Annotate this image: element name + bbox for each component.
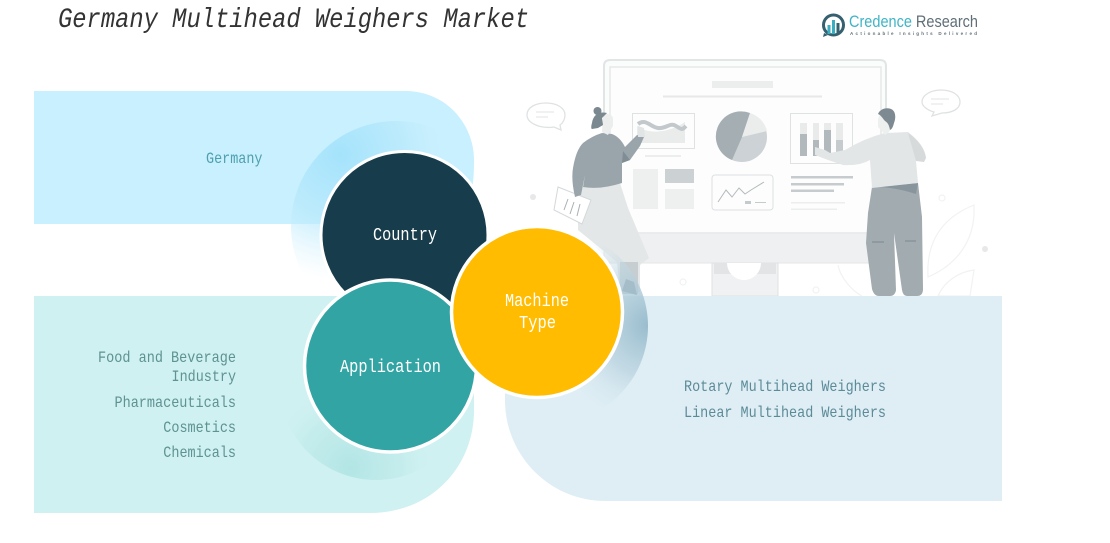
dashboard pie chart	[716, 111, 767, 162]
text: application items: Industry	[172, 368, 236, 386]
monitor	[604, 60, 886, 296]
text: machine type items: Rotary Multihead Weighers	[684, 378, 886, 396]
sweater	[572, 133, 644, 197]
man presenter	[815, 108, 926, 296]
text: application items: Food and Beverage	[98, 349, 236, 367]
circle: country	[321, 152, 488, 318]
decorative leaves and dots	[530, 194, 988, 296]
label: machine type: Machine	[505, 292, 569, 312]
text: application items: Cosmetics	[163, 419, 236, 437]
logo tagline: Actionable Insights Delivered	[850, 31, 977, 36]
logo: Credence Research	[823, 13, 978, 37]
text: machine type items: Linear Multihead Weighers	[684, 404, 886, 422]
label: application: Application	[340, 358, 441, 378]
title: Germany Multihead Weighers Market	[58, 5, 529, 36]
trousers	[866, 183, 923, 296]
label: machine type: Type	[519, 314, 556, 334]
speech bubble left	[527, 103, 565, 130]
dashboard bar chart	[790, 114, 852, 164]
text: machine type items	[684, 378, 886, 422]
logo icon	[823, 15, 844, 37]
circle: application	[304, 280, 476, 452]
text: country items: Germany	[206, 150, 263, 168]
shirt	[815, 132, 926, 188]
dashboard blocks	[633, 169, 694, 209]
text: application items: Pharmaceuticals	[114, 394, 236, 412]
dashboard text lines	[791, 176, 853, 210]
label: country: Country	[373, 226, 437, 246]
crescent: application glow	[279, 286, 473, 480]
speech bubble right	[922, 90, 960, 116]
text: application items	[98, 349, 236, 462]
hand	[638, 126, 645, 137]
crescent: country glow	[291, 121, 501, 331]
logo wordmark: Credence Research	[849, 13, 978, 31]
dashboard line chart	[712, 175, 773, 210]
head	[602, 114, 613, 135]
woman presenter	[554, 107, 649, 295]
text: application items: Chemicals	[163, 444, 236, 462]
head	[878, 112, 893, 135]
skirt	[578, 183, 649, 292]
crescent: machine type glow	[454, 229, 648, 423]
dashboard header	[663, 81, 822, 98]
dashboard area chart	[632, 114, 694, 157]
panel: machine type background	[505, 296, 1002, 501]
panel: country background	[34, 91, 474, 224]
paper	[554, 187, 591, 224]
circle: machine type	[452, 226, 622, 398]
panel: application background	[34, 296, 474, 513]
illustration: analysts at a dashboard monitor	[527, 60, 988, 296]
